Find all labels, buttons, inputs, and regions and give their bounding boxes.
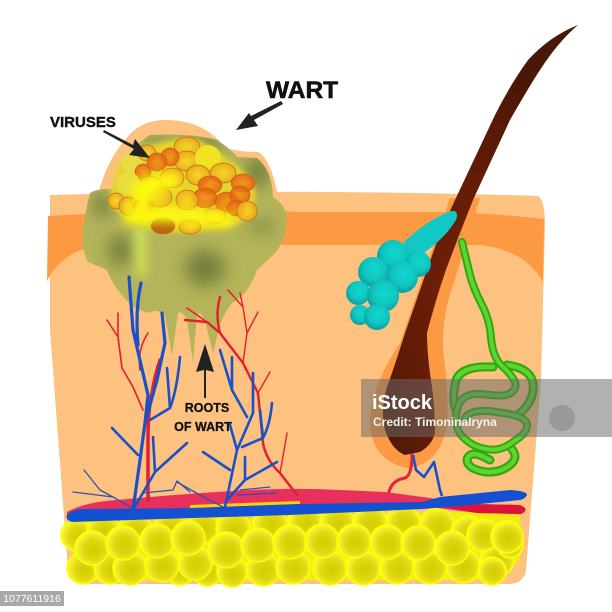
wart olive body with roots [82, 135, 287, 362]
virus cluster [108, 137, 257, 234]
watermark band: Credit: TimoninaIryna [373, 415, 497, 429]
watermark band: iStock [372, 392, 433, 414]
icon: hair shaft and bulb [383, 25, 578, 455]
red branches [107, 290, 297, 500]
arrow: to wart [236, 101, 283, 130]
hair follicle [370, 198, 480, 468]
arrow: to roots [196, 344, 214, 398]
title: WART: WART [266, 77, 338, 104]
blood vessels [67, 277, 527, 522]
panel: skin block [47, 192, 545, 584]
label: VIRUSES: VIRUSES [50, 114, 116, 131]
icon: sweat gland coil [454, 242, 533, 472]
follicle capillaries [389, 455, 412, 492]
watermark band [361, 379, 612, 437]
icon: wart growth [82, 120, 287, 362]
yellow stripe [190, 501, 300, 508]
label: roots of wart: ROOTS [185, 401, 229, 415]
arrow: to viruses [103, 130, 150, 158]
wart outer skin bump [96, 120, 282, 240]
icon: fat cell layer [61, 505, 523, 587]
red artery band [67, 489, 525, 518]
label: roots of wart: OF WART [174, 420, 232, 434]
icon: sebaceous gland [346, 211, 457, 330]
orange dermis band [47, 210, 544, 282]
blue branches [73, 277, 277, 510]
id tag: 1077611916 [3, 593, 61, 605]
blue vein band [67, 490, 527, 522]
